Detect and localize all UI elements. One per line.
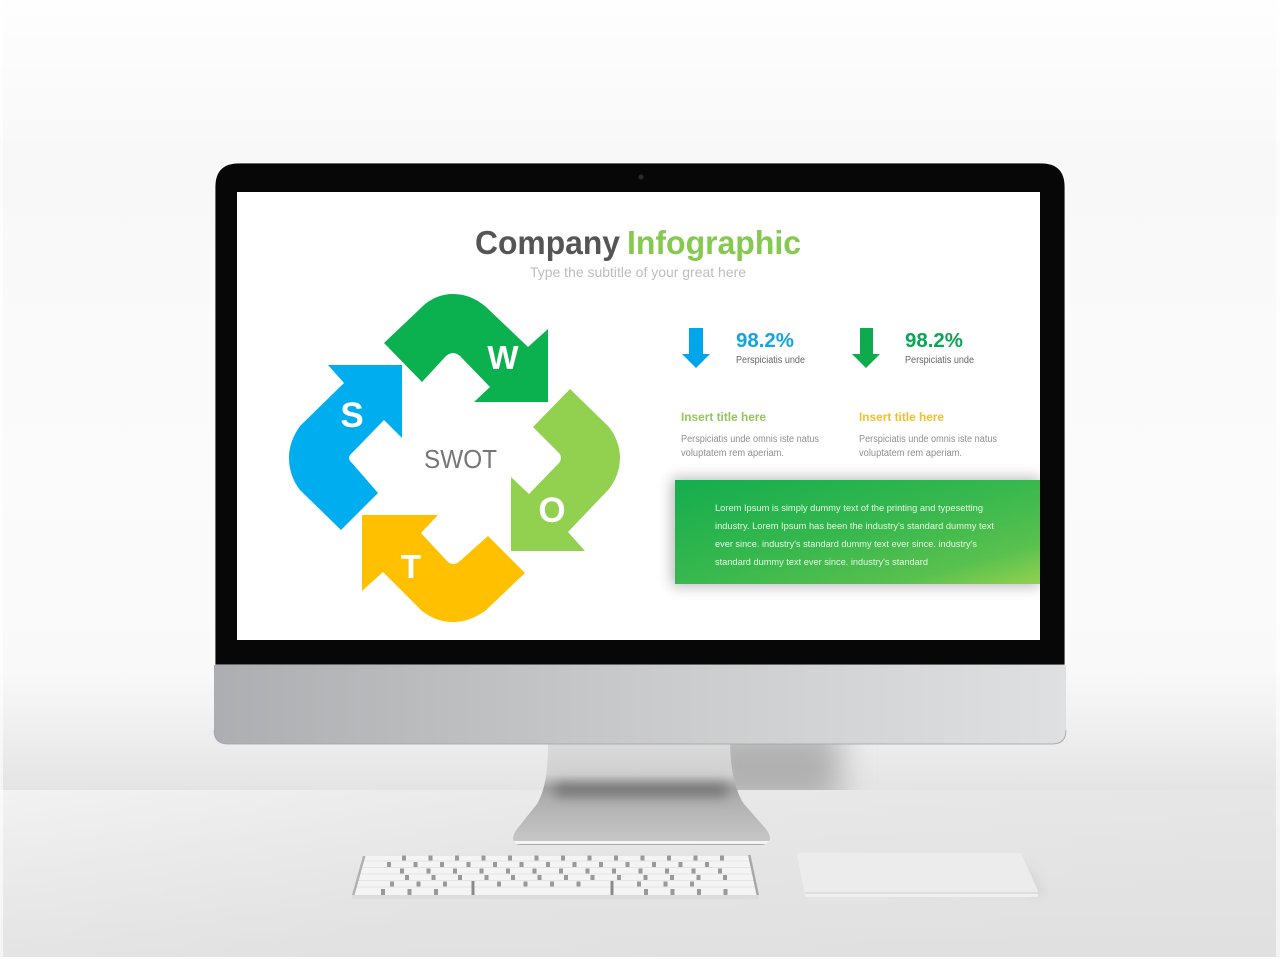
monitor chin (214, 665, 1066, 744)
arrow: O (511, 389, 620, 551)
slide title accent: Infographic (627, 224, 801, 261)
webcam (638, 174, 644, 180)
slide title: Company (475, 224, 621, 261)
text block: left: Insert title here (681, 410, 766, 424)
arrow: S: S (340, 396, 364, 435)
icon: green down arrow (852, 328, 880, 368)
keyboard (352, 855, 759, 899)
arrow: T (362, 515, 525, 622)
text block: left (681, 410, 819, 459)
subtitle: Type the subtitle of your great here (530, 264, 746, 280)
panel: green callout: Lorem Ipsum is simply dummy text of the printing and typesetting (715, 503, 983, 514)
arrow: S (289, 365, 402, 530)
arrow: T: T (401, 548, 421, 585)
arrow: W: W (487, 339, 519, 376)
monitor stand (510, 744, 772, 845)
stat: blue: 98.2% (736, 330, 794, 352)
center label: SWOT (424, 444, 497, 474)
SWOT cycle diagram (289, 294, 620, 622)
trackpad (797, 853, 1044, 898)
panel: green callout (672, 478, 1041, 586)
text block: right: voluptatem rem aperiam. (859, 448, 962, 459)
panel: green callout: ever since. industry's standard dummy text ever since. industry's (715, 539, 977, 550)
text block: left: Perspiciatis unde omnis iste natus (681, 434, 819, 445)
text block: right (859, 410, 997, 459)
stat: green: Perspiciatis unde (905, 355, 974, 366)
chin bottom edge (214, 730, 1066, 744)
monitor (214, 163, 1066, 744)
arrow: W (384, 294, 548, 402)
stat: green: 98.2% (905, 330, 963, 352)
text block: right: Insert title here (859, 410, 944, 424)
icon: blue down arrow (682, 328, 710, 368)
stat: green (852, 328, 974, 368)
monitor bezel (215, 163, 1065, 665)
stat: blue: Perspiciatis unde (736, 355, 805, 366)
stat: blue (682, 328, 805, 368)
panel: green callout: standard dummy text ever since. industry's standard (715, 557, 928, 568)
arrow: O: O (538, 491, 566, 530)
text block: left: voluptatem rem aperiam. (681, 448, 784, 459)
text block: right: Perspiciatis unde omnis iste natus (859, 434, 997, 445)
screen (237, 192, 1040, 640)
panel: green callout: industry. Lorem Ipsum has been the industry's standard dummy text (715, 521, 994, 532)
